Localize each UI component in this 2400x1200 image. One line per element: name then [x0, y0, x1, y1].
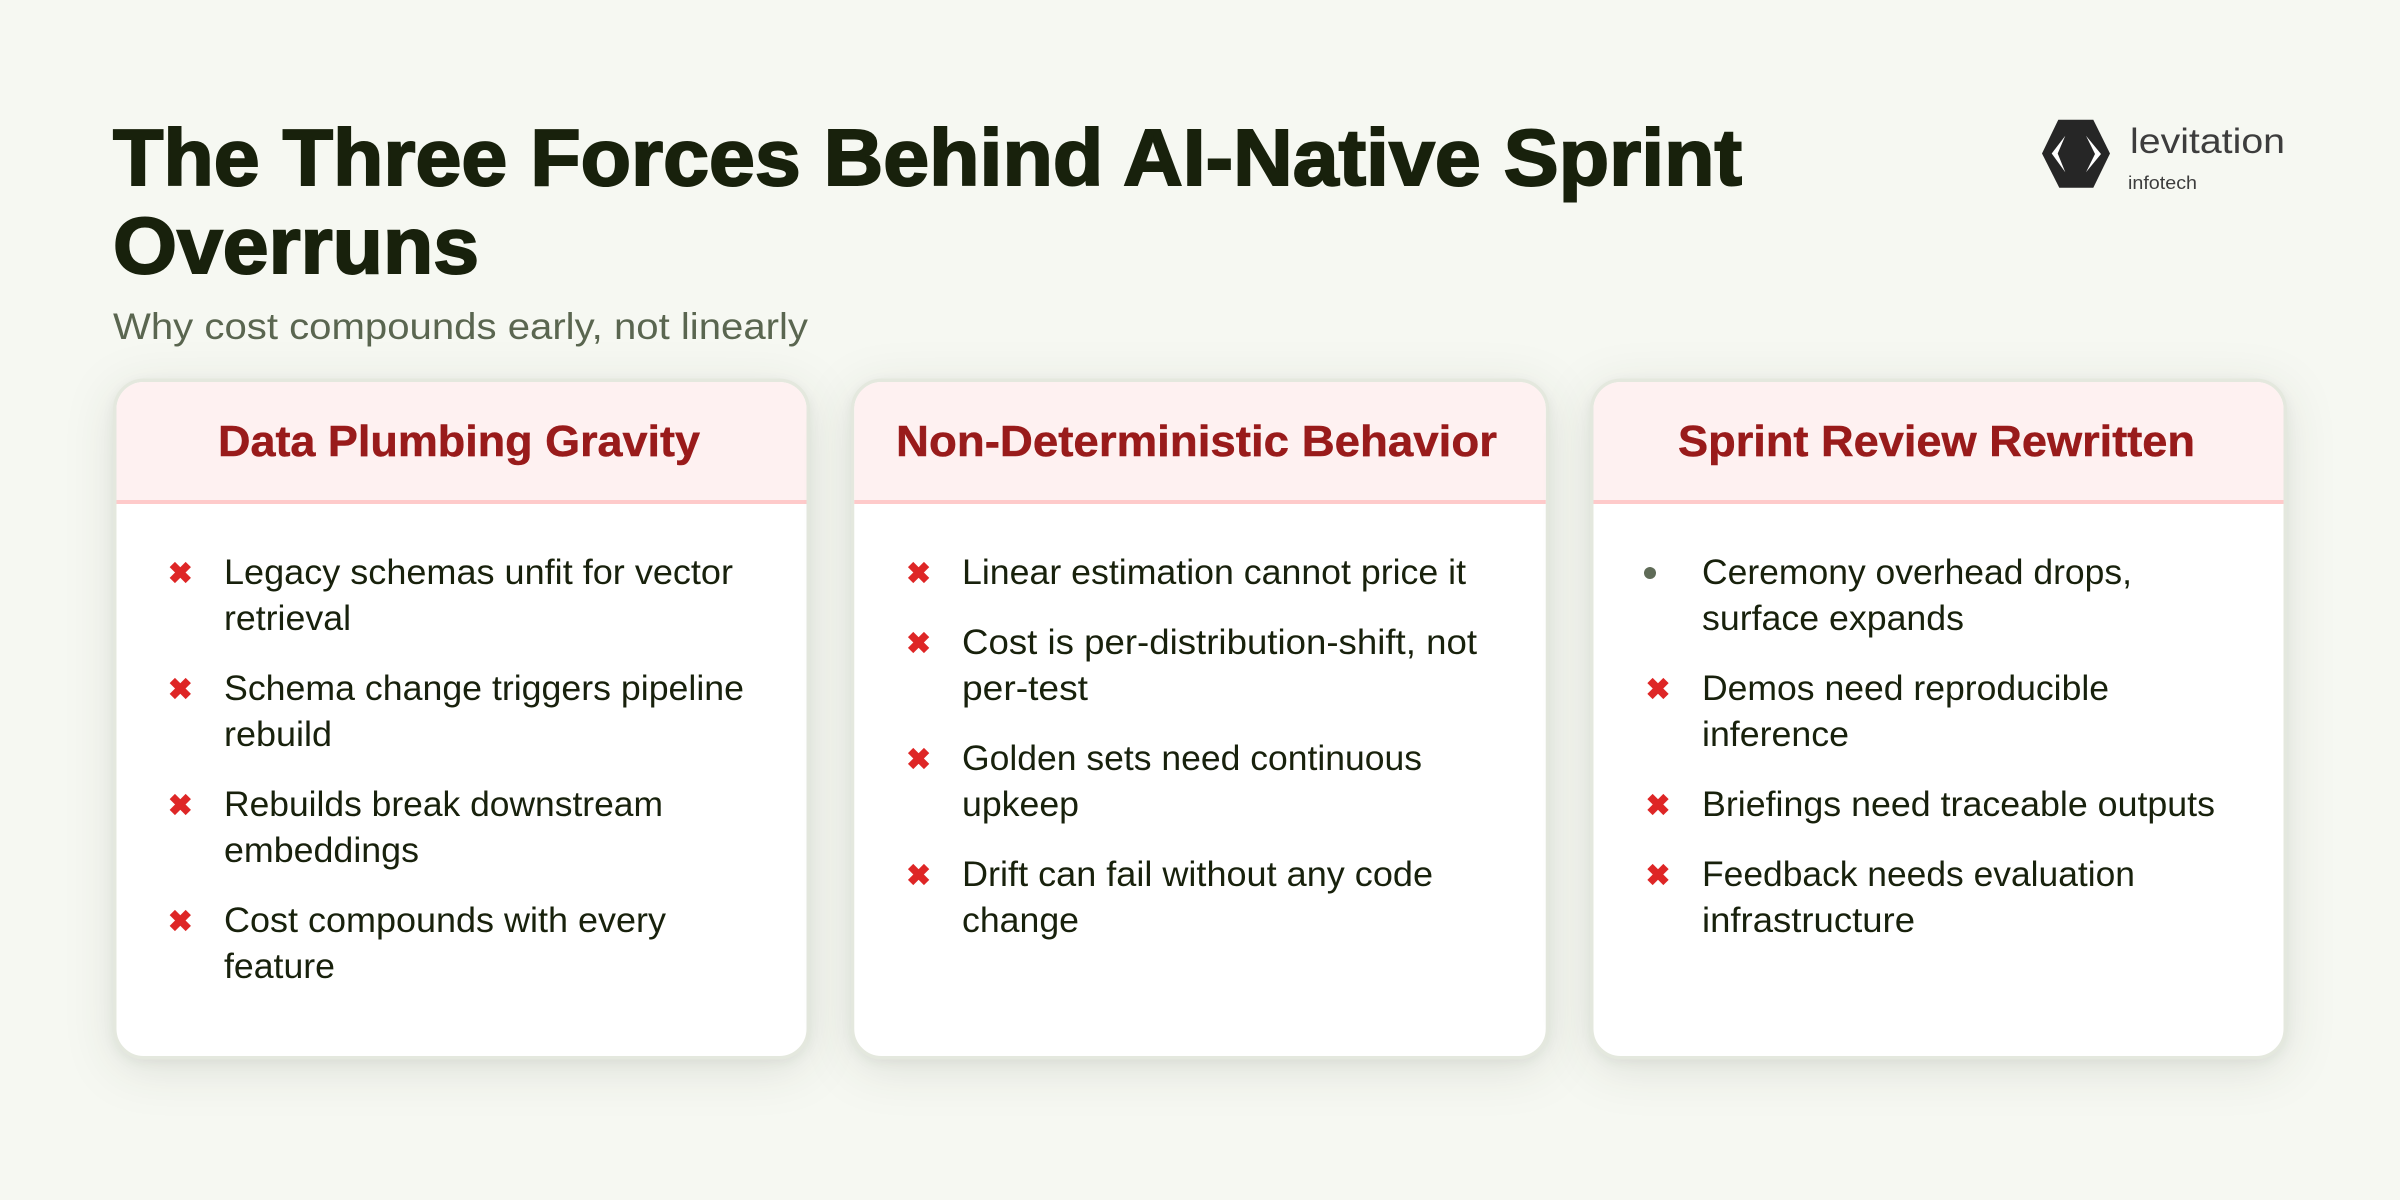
list item: Legacy schemas unfit for vector — [224, 553, 733, 592]
logo wordmark: infotech — [2128, 173, 2197, 193]
panel: Data Plumbing Gravity — [115, 380, 808, 1058]
bullet list — [172, 553, 744, 986]
bullet list — [1644, 553, 2215, 940]
list item — [962, 623, 1477, 708]
panel: Sprint Review Rewritten — [1592, 380, 2285, 1058]
list item — [1702, 669, 2109, 754]
list item: inference — [1702, 715, 1849, 754]
list item: Rebuilds break downstream — [224, 785, 663, 824]
list item: surface expands — [1702, 599, 1964, 638]
icon: cross — [1650, 680, 1666, 696]
panel header — [1594, 382, 2284, 504]
icon: cross — [172, 912, 188, 928]
title: Overruns — [113, 201, 479, 290]
list item: feature — [224, 947, 335, 986]
subtitle: Why cost compounds early, not linearly — [113, 305, 808, 347]
list item: Drift can fail without any code — [962, 855, 1433, 894]
list item: rebuild — [224, 715, 332, 754]
panel header: Non-Deterministic Behavior — [896, 417, 1497, 466]
list item — [1702, 553, 2132, 638]
list item: Ceremony overhead drops, — [1702, 553, 2132, 592]
icon: cross — [911, 634, 927, 650]
list item — [224, 785, 663, 870]
icon: dot — [1644, 567, 1656, 579]
list item: Golden sets need continuous — [962, 739, 1422, 778]
icon: cross — [172, 564, 188, 580]
list item — [1702, 855, 2135, 940]
title: The Three Forces Behind AI-Native Sprint — [113, 113, 1742, 202]
logo: levitation infotech — [2042, 120, 2285, 193]
icon: cross — [1650, 866, 1666, 882]
list item — [224, 901, 667, 986]
list item — [962, 739, 1422, 824]
list item: retrieval — [224, 599, 351, 638]
icon: cross — [911, 564, 927, 580]
list item: Linear estimation cannot price it — [962, 553, 1466, 592]
panel header: Sprint Review Rewritten — [1678, 417, 2195, 466]
panel: Non-Deterministic Behavior — [852, 380, 1548, 1058]
list item: Cost is per-distribution-shift, not — [962, 623, 1477, 662]
icon: cross — [911, 750, 927, 766]
list item: infrastructure — [1702, 901, 1915, 940]
list item: change — [962, 901, 1079, 940]
list item — [224, 669, 744, 754]
logo wordmark — [2128, 122, 2285, 193]
panel header — [116, 382, 806, 504]
list item: Feedback needs evaluation — [1702, 855, 2135, 894]
panel header: Data Plumbing Gravity — [218, 417, 701, 466]
list item: upkeep — [962, 785, 1079, 824]
list item: Demos need reproducible — [1702, 669, 2109, 708]
list item: embeddings — [224, 831, 419, 870]
list item — [962, 855, 1433, 940]
list item — [224, 553, 733, 638]
bullet list — [911, 553, 1477, 940]
icon: cross — [172, 796, 188, 812]
logo wordmark: levitation — [2130, 122, 2285, 161]
icon: cross — [911, 866, 927, 882]
list item: per-test — [962, 669, 1088, 708]
icon: cross — [172, 680, 188, 696]
list item: Schema change triggers pipeline — [224, 669, 744, 708]
icon: hexagon with chevrons — [2042, 120, 2110, 188]
list item: Cost compounds with every — [224, 901, 667, 940]
title — [113, 113, 1742, 290]
icon: cross — [1650, 796, 1666, 812]
list item: Briefings need traceable outputs — [1702, 785, 2215, 824]
panel header — [854, 382, 1546, 504]
